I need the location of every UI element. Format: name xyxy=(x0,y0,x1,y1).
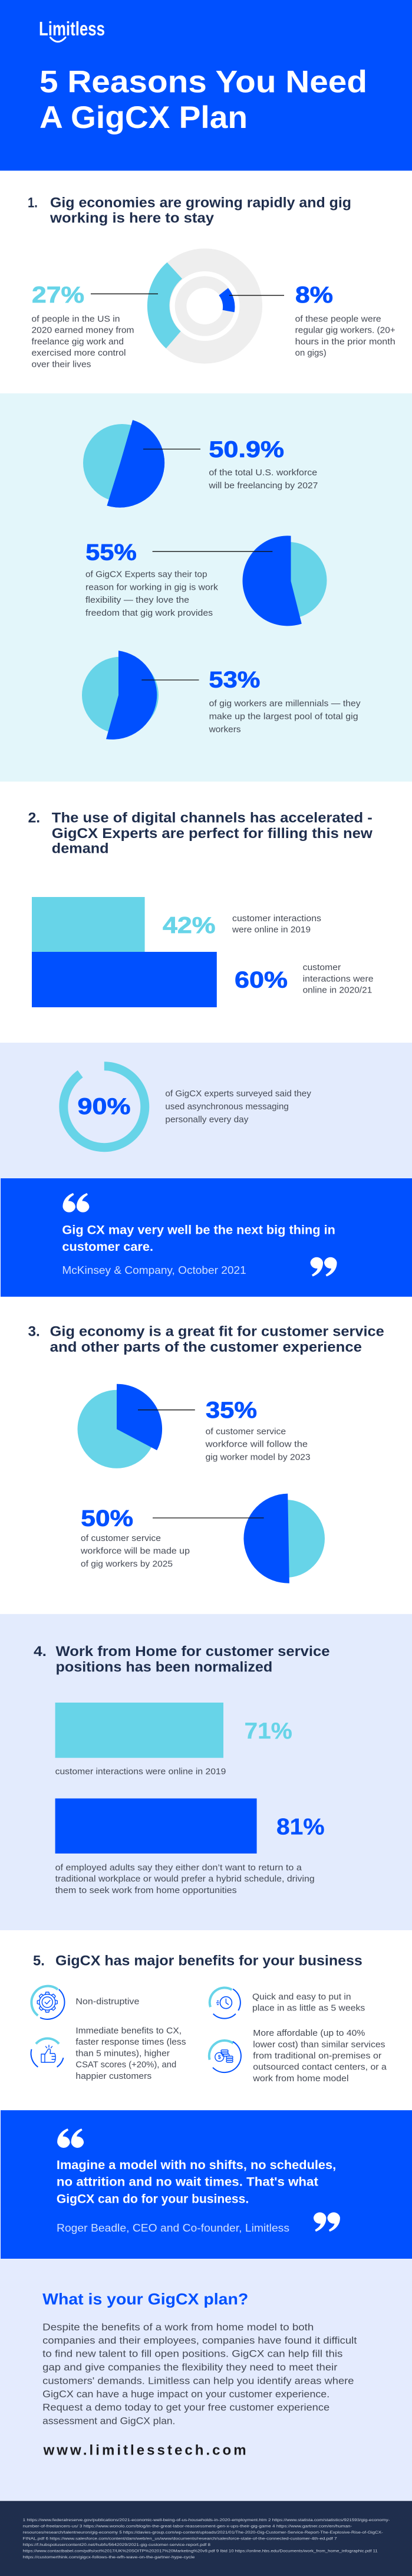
footer: sources: resources/research/talentneuron/gig-economy 5 https://davies-group.com/wp-content/uploads/2021/01/The-2020-Gig-Customer-Service-Report-The-Explosive-Rise-of-GigCX- xyxy=(23,2531,383,2535)
icon: closing quote xyxy=(310,1257,337,1276)
benefit: more affordable: outsourced contact centers, or a xyxy=(253,2063,387,2072)
stat: 42%: were online in 2019 xyxy=(232,925,311,935)
benefit: immediate benefits xyxy=(75,2026,186,2081)
section 1 heading xyxy=(28,195,351,226)
plan body text: customers' demands. Limitless can help you identify areas where xyxy=(42,2375,354,2386)
stat: 60%: online in 2020/21 xyxy=(303,986,372,995)
pie chart: 35% xyxy=(78,1384,195,1468)
bar: 81%: of employed adults say they either don’t want to return to a xyxy=(55,1864,302,1873)
text: 90% description: used asynchronous messaging xyxy=(165,1102,289,1112)
stat: 42%: 42% xyxy=(163,913,216,938)
icon: opening quote xyxy=(57,2128,84,2148)
quote text: Imagine a model with no shifts, no schedules, xyxy=(57,2158,336,2172)
stat: 8% xyxy=(295,282,395,358)
footer: sources: https://customerthink.com/gigcx-follows-the-wfh-wave-on-the-gartner-hype-cycle xyxy=(23,2555,195,2559)
stat: 50.9%: 50.9% xyxy=(209,437,284,462)
stat: 50.9%: will be freelancing by 2027 xyxy=(208,481,318,491)
benefit: non-disruptive: Non-distruptive xyxy=(75,1997,139,2007)
pie chart: 50% xyxy=(153,1494,325,1583)
stat: 35%: gig worker model by 2023 xyxy=(206,1453,311,1463)
stat: 8%: regular gig workers. (20+ xyxy=(295,326,395,336)
stat: 27%: exercised more control xyxy=(32,349,126,358)
icon: coins: $ xyxy=(218,2054,221,2060)
benefit: more affordable xyxy=(252,2029,387,2084)
stat: 60%: 60% xyxy=(235,968,288,993)
ring chart: 90% xyxy=(64,1066,145,1148)
plan body text: Despite the benefits of a work from home model to both xyxy=(42,2321,314,2332)
stat: 8%: on gigs) xyxy=(295,349,327,358)
stat: 35% xyxy=(205,1398,311,1463)
section 2 heading: 2. xyxy=(28,810,40,826)
plan body text: gap and give companies the flexibility they need to meet their xyxy=(42,2362,338,2373)
benefit: immediate benefits: than 5 minutes), higher xyxy=(75,2049,170,2058)
title: A GigCX Plan xyxy=(39,100,248,135)
quote attribution: Roger Beadle, CEO and Co-founder, Limitless xyxy=(57,2222,289,2234)
panel: section 4 work from home xyxy=(0,1614,412,1930)
callout: Roger Beadle quote xyxy=(1,2110,412,2259)
text: 90% description xyxy=(165,1089,312,1125)
stat: 27%: 27% xyxy=(32,282,84,308)
stat: 35%: 35% xyxy=(206,1398,257,1423)
stat: 53% xyxy=(209,668,361,735)
stat: 53%: workers xyxy=(209,725,241,735)
concentric donut chart xyxy=(91,260,284,352)
stat: 27%: of people in the US in xyxy=(32,315,120,324)
stat: 60%: interactions were xyxy=(303,974,374,984)
benefit: immediate benefits: faster response times (less xyxy=(75,2038,186,2047)
stat: 50.9%: of the total U.S. workforce xyxy=(209,468,317,478)
panel: 90% messaging xyxy=(0,1043,412,1178)
stat: 53%: of gig workers are millennials — they xyxy=(209,699,361,709)
section 3 heading: 3. xyxy=(28,1323,40,1339)
quote text: no attrition and no wait times. That's what xyxy=(57,2175,318,2189)
section 2 heading xyxy=(28,810,373,856)
header banner xyxy=(0,0,412,170)
section 4 heading: positions has been normalized xyxy=(55,1659,272,1675)
logo: Limitless: Limitless xyxy=(39,18,105,40)
stat: 53%: 53% xyxy=(209,668,260,693)
stat: 53%: make up the largest pool of total gig xyxy=(209,712,358,722)
benefit: immediate benefits: CSAT scores (+20%), and xyxy=(75,2061,176,2070)
icon: clock xyxy=(210,1988,240,2019)
website: www.limitlesstech.com xyxy=(43,2443,246,2459)
title xyxy=(39,65,367,135)
stat: 8%: of these people were xyxy=(295,315,381,324)
stat: 42%: customer interactions xyxy=(232,914,321,924)
stat: 55%: freedom that gig work provides xyxy=(85,609,213,618)
bar: 81%: them to seek work from home opportunities xyxy=(55,1886,237,1895)
stat: 50%: 50% xyxy=(81,1506,133,1532)
panel: what is your GigCX plan xyxy=(0,2259,412,2501)
section 5 heading: GigCX has major benefits for your business xyxy=(55,1953,362,1969)
bar: 71% xyxy=(55,1703,292,1776)
benefit: quick and easy: Quick and easy to put in xyxy=(252,1992,351,2002)
footer: sources xyxy=(0,2501,412,2576)
quote text xyxy=(57,2158,336,2206)
stat: 55%: reason for working in gig is work xyxy=(85,583,219,592)
benefit: quick and easy: place in as little as 5 weeks xyxy=(252,2004,365,2013)
stat: 35%: of customer service xyxy=(206,1427,286,1437)
section 2 heading: GigCX Experts are perfect for filling this new xyxy=(52,826,373,842)
plan body text: GigCX can have a huge impact on your customer experience. xyxy=(42,2388,329,2400)
section 4 heading xyxy=(34,1644,330,1675)
pie chart: 55% xyxy=(153,535,327,626)
icon: thumbs up xyxy=(31,2039,64,2067)
quote attribution: McKinsey & Company, October 2021 xyxy=(62,1264,246,1276)
footer: sources: FINAL.pdf 6 https://www.salesforce.com/content/dam/web/en_us/www/documents/research/salesforce-state-of-the-connected-customer-4th-ed.pdf 7 xyxy=(23,2536,337,2541)
plan body text: Request a demo today to get your free customer experience xyxy=(42,2402,329,2413)
stat: 42% xyxy=(163,913,321,938)
plan body text: companies and their employees, companies have found it difficult xyxy=(42,2335,357,2346)
stat: 50%: of customer service xyxy=(81,1534,161,1543)
section 3 heading: Gig economy is a great fit for customer service xyxy=(50,1323,384,1339)
stat: 55%: 55% xyxy=(85,540,137,566)
stat: 35%: workforce will follow the xyxy=(205,1440,308,1450)
stat: 50.9% xyxy=(208,437,318,491)
benefit: more affordable: from traditional on-premises or xyxy=(253,2052,381,2061)
stat: 27%: freelance gig work and xyxy=(32,337,124,347)
callout: McKinsey quote xyxy=(1,1178,412,1297)
footer: sources: https://www.contactbabel.com/pdfs/oct%2017/UK%20SOITP%202017%20Marketing%20v9.pdf 9 Ibid 10 https://online.hbs.edu/Documents/work_from_home_infographic.pdf 11 xyxy=(23,2549,378,2553)
text: 90% description: personally every day xyxy=(165,1115,249,1125)
benefit: more affordable: work from home model xyxy=(252,2074,349,2084)
stat: 60% xyxy=(235,963,374,995)
benefit: immediate benefits: happier customers xyxy=(75,2072,151,2081)
stat: 50% xyxy=(80,1506,190,1569)
stat: 60%: customer xyxy=(303,963,341,972)
plan heading: What is your GigCX plan? xyxy=(42,2290,248,2308)
footer: sources: https://f.hubspotusercontent20.net/hubfs/5642029/2021-gig-customer-service-report.pdf 8 xyxy=(23,2543,210,2547)
icon: coins xyxy=(209,2041,241,2072)
section 5 heading: 5. xyxy=(33,1953,45,1969)
stat: 50%: workforce will be made up xyxy=(80,1546,190,1556)
pie chart: 50.9% xyxy=(83,420,200,508)
pie chart: 53% xyxy=(82,650,199,740)
section 4 heading: Work from Home for customer service xyxy=(55,1644,330,1660)
icon: gear with check xyxy=(31,1986,64,2019)
bar chart: online interactions xyxy=(32,897,374,1007)
stat: 27%: over their lives xyxy=(32,360,91,369)
quote text: customer care. xyxy=(62,1240,153,1254)
benefit: more affordable: lower cost) than similar services xyxy=(253,2040,385,2049)
footer: sources: 1 https://www.federalreserve.gov/publications/2021-economic-well-being-of-us-households-in-2020-employment.htm 2 https://www.statista.com/statistics/921593/gig-economy- xyxy=(23,2518,390,2522)
panel: freelance pie stats xyxy=(0,393,412,781)
bar: 71%: customer interactions were online in 2019 xyxy=(55,1767,226,1776)
section 4 heading: 4. xyxy=(34,1644,47,1660)
stat: 55% xyxy=(85,540,219,618)
section 3 heading xyxy=(28,1323,384,1355)
stat: 27% xyxy=(32,282,134,369)
stat: 55%: flexibility — they love the xyxy=(85,596,189,605)
bar: 81% xyxy=(55,1799,325,1895)
plan body text xyxy=(42,2321,357,2426)
benefit: quick and easy xyxy=(252,1992,365,2013)
title: 5 Reasons You Need xyxy=(39,65,367,100)
quote text: Gig CX may very well be the next big thing in xyxy=(62,1223,335,1237)
quote text: GigCX can do for your business. xyxy=(57,2192,249,2206)
footer: sources: number-of-freelancers-us/ 3 https://www.wonolo.com/blog/in-the-great-labor-reassessment-gen-x-ups-their-gig-game 4 https://www.gartner.com/en/human- xyxy=(23,2524,352,2528)
bar: 81%: 81% xyxy=(276,1814,325,1839)
section 1 heading: working is here to stay xyxy=(50,210,215,226)
stat: 8%: hours in the prior month xyxy=(295,337,395,347)
benefit: immediate benefits: Immediate benefits to CX, xyxy=(75,2026,182,2036)
section 2 heading: demand xyxy=(52,841,109,856)
benefit: more affordable: More affordable (up to 40% xyxy=(253,2029,365,2038)
icon: closing quote xyxy=(314,2212,340,2232)
section 1 heading: 1. xyxy=(28,195,38,211)
plan body text: assessment and GigCX plan. xyxy=(42,2415,175,2426)
icon: opening quote xyxy=(62,1193,90,1213)
text: 90% description: of GigCX experts surveyed said they xyxy=(165,1089,312,1099)
section 1 heading: Gig economies are growing rapidly and gig xyxy=(50,195,351,211)
section 2 heading: The use of digital channels has accelerated - xyxy=(52,810,373,826)
quote text xyxy=(62,1223,335,1254)
section 3 heading: and other parts of the customer experience xyxy=(50,1339,362,1355)
stat: 55%: of GigCX Experts say their top xyxy=(85,570,207,579)
stat: 50%: of gig workers by 2025 xyxy=(81,1560,173,1569)
stat: 27%: 2020 earned money from xyxy=(32,326,134,336)
bar: 81%: traditional workplace or would prefer a hybrid schedule, driving xyxy=(55,1875,315,1884)
plan body text: to find new talent to fill open positions. GigCX can help fill this xyxy=(42,2348,342,2360)
bar: 71%: 71% xyxy=(245,1719,292,1744)
stat: 8%: 8% xyxy=(295,282,333,308)
ring chart: 90%: 90% xyxy=(78,1094,131,1119)
